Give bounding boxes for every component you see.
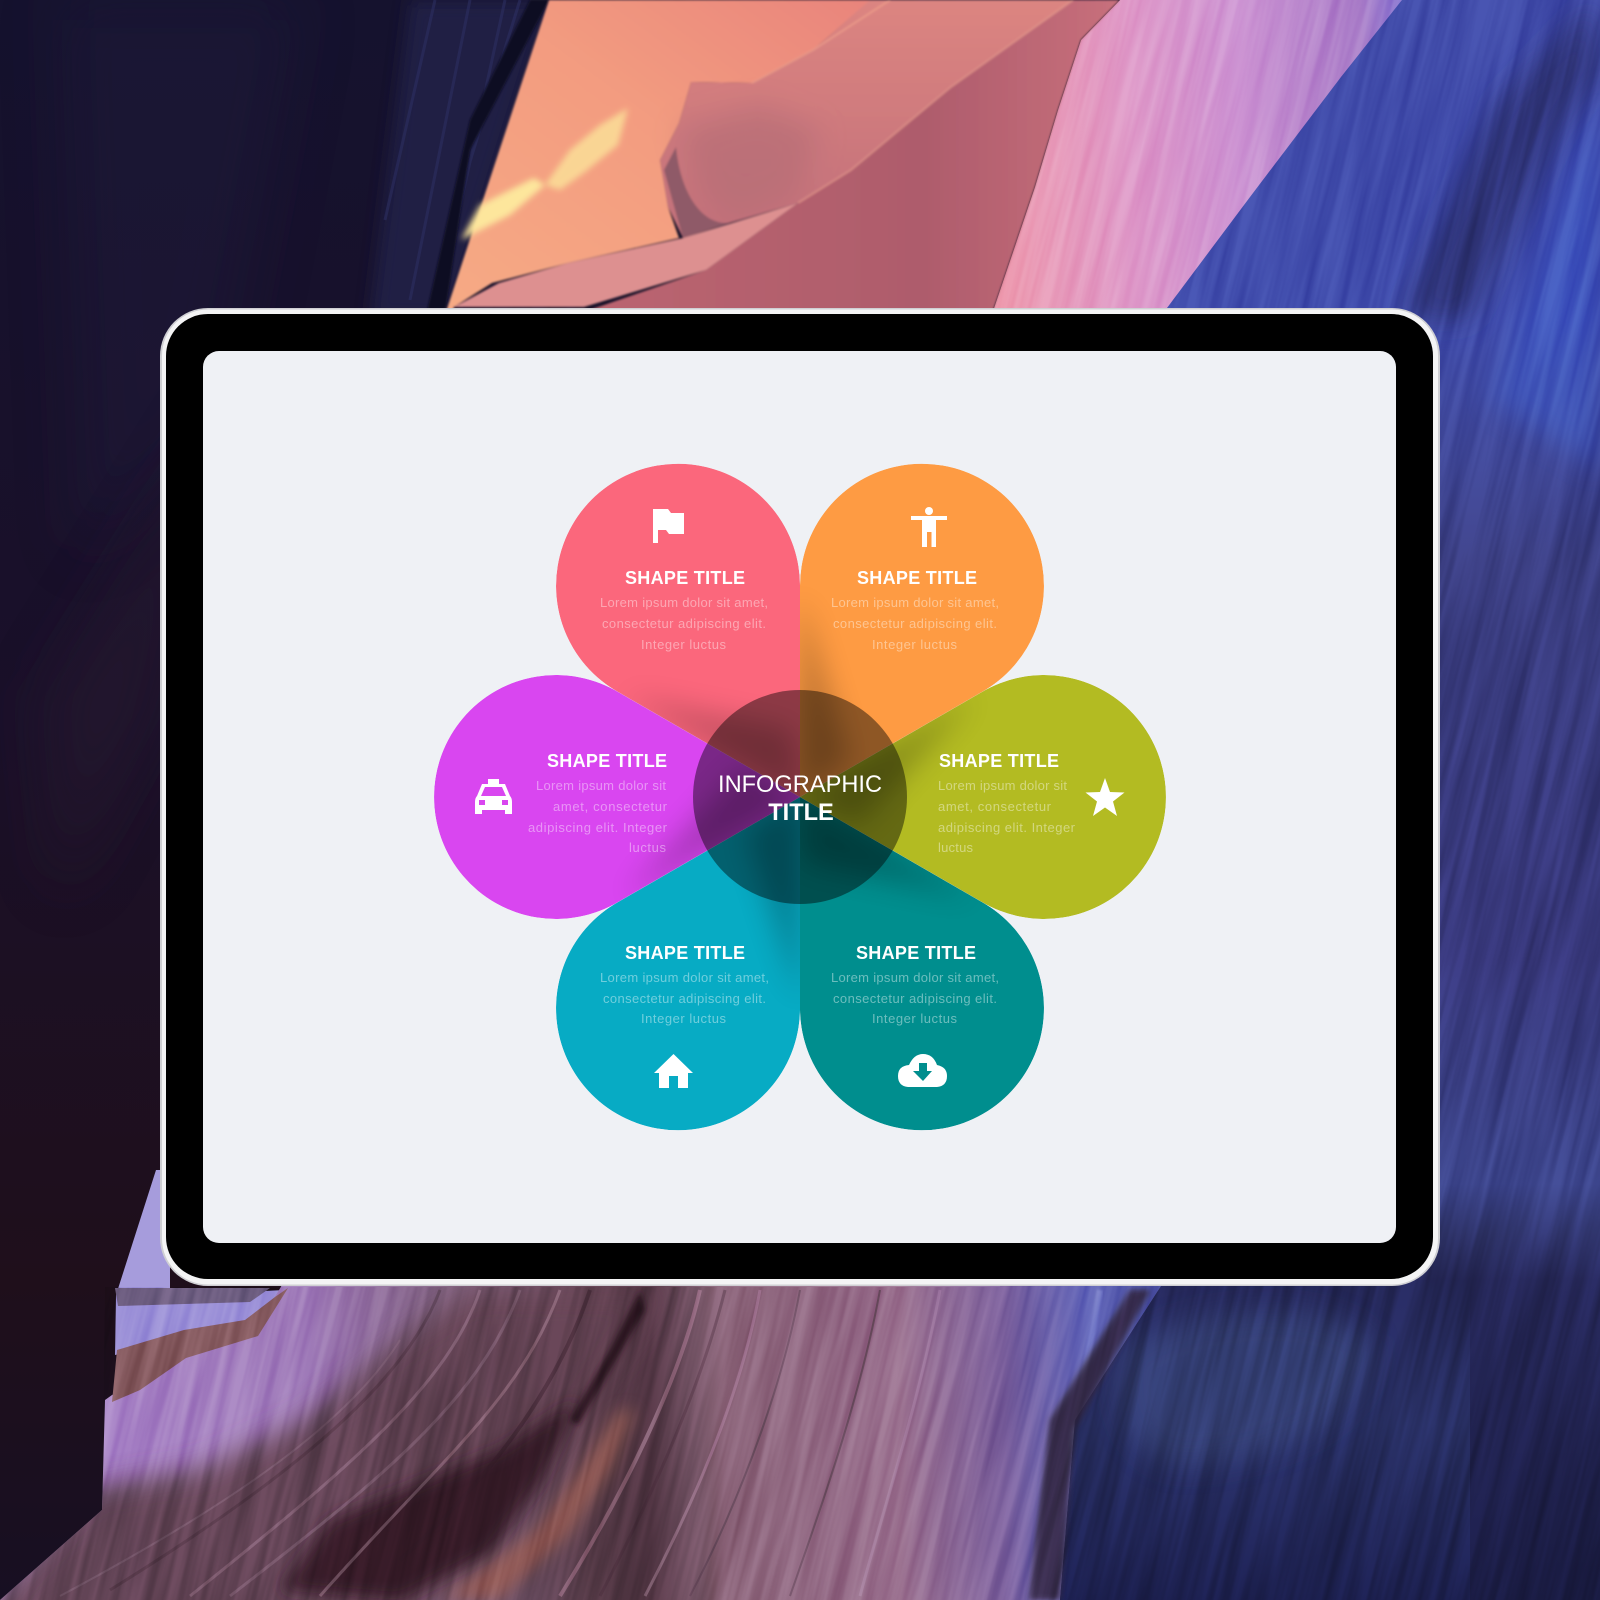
teal petal text: consectetur adipiscing elit. — [833, 991, 997, 1006]
icon: cloud download — [898, 1054, 947, 1087]
petal: teal — [800, 797, 1044, 1130]
salmon sandstone — [440, 0, 1120, 330]
pink petal text: SHAPE TITLE — [625, 568, 745, 588]
green petal text: SHAPE TITLE — [939, 751, 1059, 771]
teal petal text: Lorem ipsum dolor sit amet, — [831, 970, 999, 985]
cyan petal text: consectetur adipiscing elit. — [603, 991, 766, 1006]
orange petal text: Integer luctus — [872, 637, 958, 652]
lilac rock face — [990, 0, 1402, 320]
center title: INFOGRAPHIC — [718, 772, 882, 798]
orange petal text: consectetur adipiscing elit. — [833, 616, 997, 631]
pink petal text — [600, 568, 768, 652]
green petal text: adipiscing elit. Integer — [938, 820, 1076, 835]
cyan petal text: Lorem ipsum dolor sit amet, — [600, 970, 769, 985]
cyan petal text: SHAPE TITLE — [625, 943, 745, 963]
pink petal text: Integer luctus — [641, 637, 726, 652]
green petal text — [938, 751, 1076, 855]
pink petal text: Lorem ipsum dolor sit amet, — [600, 595, 768, 610]
purple petal text: adipiscing elit. Integer — [528, 820, 668, 835]
icon: taxi — [475, 779, 512, 814]
cyan petal text — [600, 943, 769, 1026]
cyan petal text: Integer luctus — [641, 1011, 726, 1026]
center circle — [693, 690, 907, 904]
green petal text: amet, consectetur — [938, 799, 1052, 814]
navy rock at lower right — [1030, 1280, 1470, 1600]
icon: home — [654, 1054, 693, 1088]
teal petal text — [831, 943, 999, 1026]
icon: flag — [653, 509, 684, 543]
purple petal text: SHAPE TITLE — [547, 751, 667, 771]
center title: TITLE — [768, 800, 834, 826]
petal: cyan — [556, 797, 800, 1130]
lower rock: layered sandstone — [0, 1280, 1165, 1600]
petal: orange — [800, 464, 1044, 797]
blue wall — [1000, 0, 1600, 1600]
flower diagram — [434, 464, 1166, 1130]
orange petal text: Lorem ipsum dolor sit amet, — [831, 595, 999, 610]
icon: star — [1086, 778, 1124, 816]
orange petal text: SHAPE TITLE — [857, 568, 977, 588]
petal: green — [800, 675, 1166, 919]
purple petal text: Lorem ipsum dolor sit — [536, 778, 666, 793]
orange petal text — [831, 568, 999, 652]
purple petal text — [528, 751, 668, 855]
petal: pink — [556, 464, 800, 797]
green petal text: luctus — [938, 840, 974, 855]
petal: purple — [434, 675, 800, 919]
purple petal text: amet, consectetur — [553, 799, 668, 814]
device black bezel — [166, 314, 1433, 1279]
device frame — [160, 308, 1440, 1286]
purple petal text: luctus — [629, 840, 666, 855]
teal petal text: SHAPE TITLE — [856, 943, 976, 963]
teal petal text: Integer luctus — [872, 1011, 958, 1026]
icon: person with arms out — [911, 507, 947, 547]
device screen — [203, 351, 1396, 1243]
green petal text: Lorem ipsum dolor sit — [938, 778, 1067, 793]
pink petal text: consectetur adipiscing elit. — [602, 616, 766, 631]
center title — [718, 772, 882, 826]
